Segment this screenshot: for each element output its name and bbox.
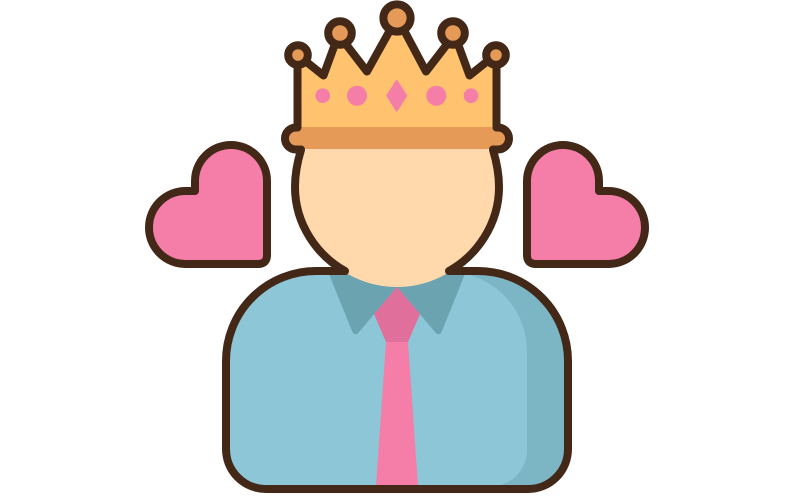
crown band [284,127,510,150]
head [295,89,499,287]
crown orbs [288,4,506,65]
necktie [374,287,420,486]
crown points [298,24,496,130]
icon: right heart [527,145,645,264]
collar [329,274,465,334]
crown [284,4,510,150]
crown gems [315,80,478,111]
icon: left heart [149,145,267,264]
body: shirt [226,271,568,489]
